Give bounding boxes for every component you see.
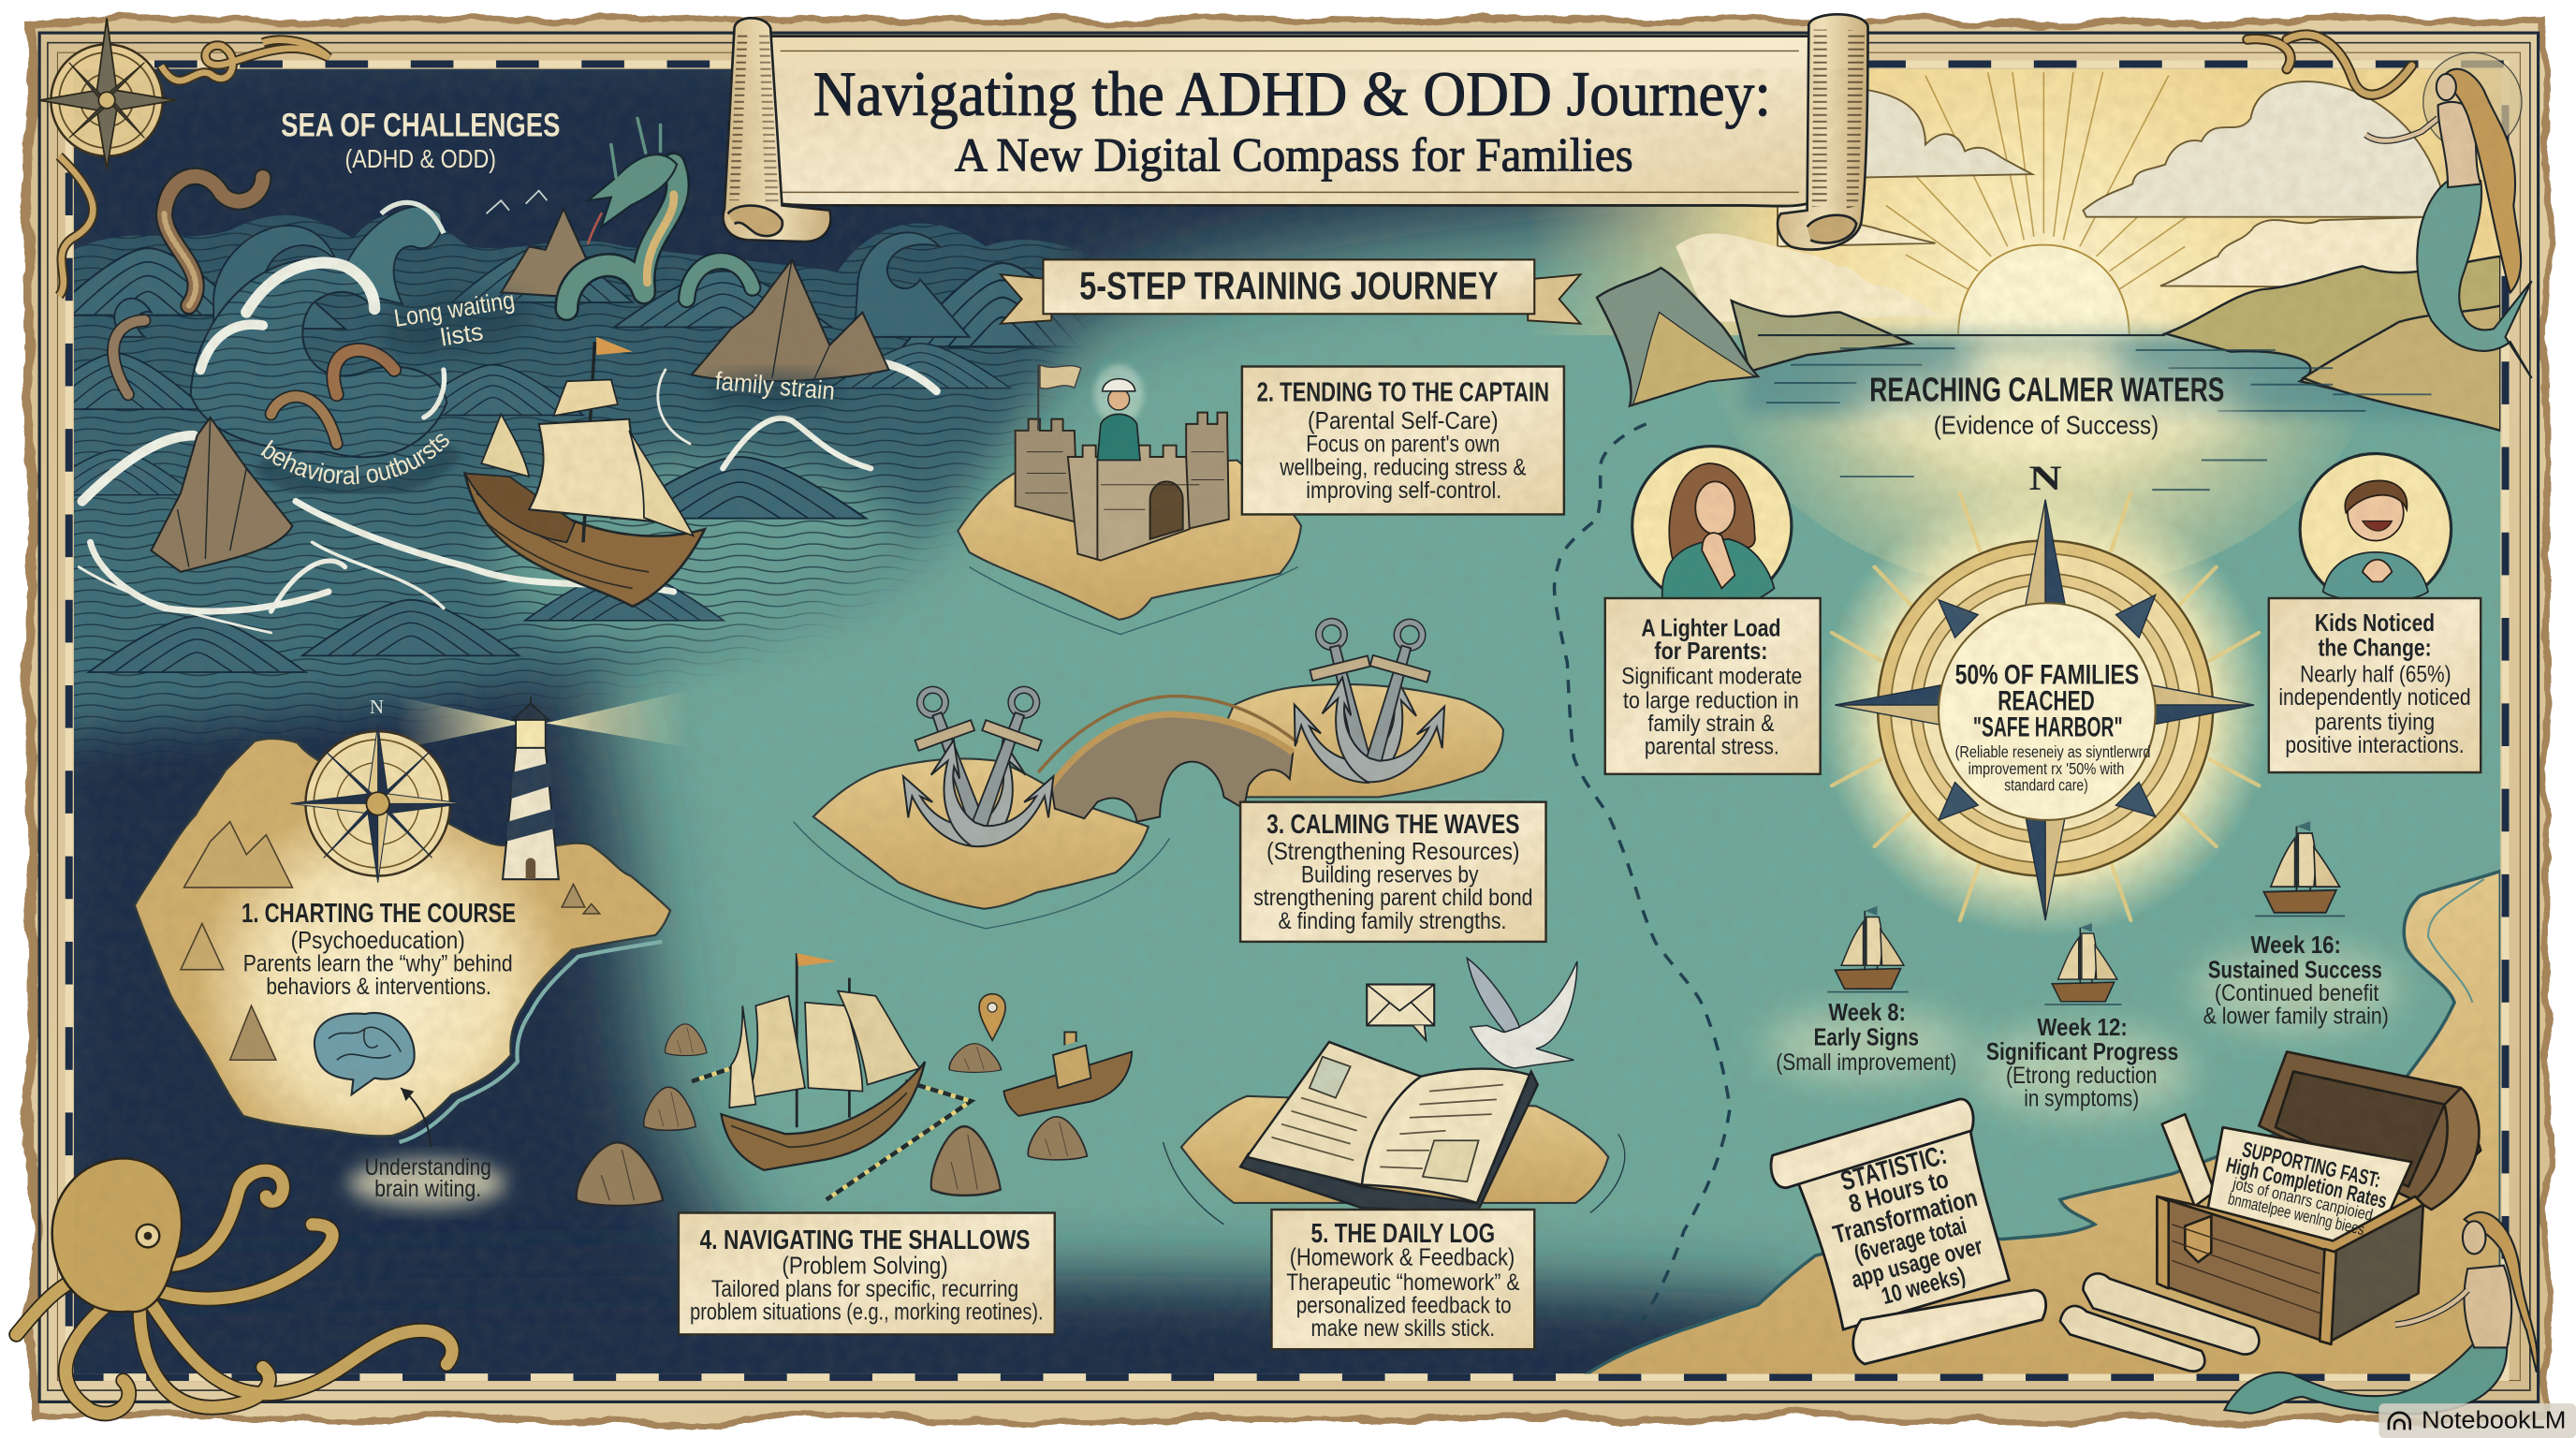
timeline: week 12: in symptoms) bbox=[2024, 1086, 2139, 1111]
timeline: week 8 bbox=[1764, 906, 1969, 1078]
step 2 island and castle bbox=[958, 365, 1301, 635]
sun bbox=[1958, 245, 2130, 335]
step 1 text: Parents learn the “why” behind bbox=[243, 951, 513, 976]
clouds bbox=[1676, 81, 2448, 322]
galleon bbox=[721, 953, 925, 1170]
rolling swells bbox=[49, 248, 247, 315]
rolled paper bbox=[2162, 1114, 2215, 1206]
compass needle points bbox=[1835, 500, 2254, 920]
step 4 card: problem situations (e.g., morking reotines). bbox=[690, 1300, 1043, 1326]
left headland bbox=[1597, 268, 1910, 406]
sandy shore bbox=[1577, 871, 2500, 1381]
arrow and caption: brain wiring: Understanding bbox=[365, 1155, 491, 1181]
timeline: week 12: Week 12: bbox=[2037, 1013, 2128, 1041]
title text: Navigating the ADHD & ODD Journey: bbox=[813, 59, 1771, 129]
card: kids noticed: positive interactions. bbox=[2285, 733, 2465, 758]
step 3 card: Building reserves by bbox=[1301, 863, 1479, 888]
timeline: week 16 bbox=[2195, 821, 2398, 1030]
step 3 card: & finding family strengths. bbox=[1278, 909, 1506, 934]
arrow and caption: brain wiring: brain witing. bbox=[374, 1177, 481, 1202]
sun rays bbox=[1886, 72, 2215, 289]
top left compass ornament bbox=[39, 18, 329, 296]
title scroll banner: A New Digital Compass for Families bbox=[955, 130, 1633, 183]
timeline: week 8: Week 8: bbox=[1828, 998, 1906, 1026]
wave foam bbox=[79, 263, 936, 633]
statistic scroll: Transformation bbox=[1830, 1182, 1981, 1249]
chest lid bbox=[2259, 1051, 2481, 1205]
label: long waiting lists: Long waiting bbox=[392, 286, 517, 332]
treasure chest bbox=[2157, 1051, 2481, 1344]
arrow and caption: brain wiring bbox=[348, 1088, 506, 1206]
step 1 text bbox=[242, 899, 516, 1000]
anchors bbox=[870, 669, 1044, 868]
octopus bbox=[17, 1158, 452, 1414]
big crest wave bbox=[191, 259, 446, 457]
label: behavioral outbursts: behavioral outbursts bbox=[260, 434, 449, 485]
timeline: week 8: (Small improvement) bbox=[1776, 1050, 1956, 1076]
step 3 card: (Strengthening Resources) bbox=[1266, 837, 1519, 865]
step 5 card: make new skills stick. bbox=[1311, 1316, 1495, 1342]
statistic scroll: STATISTIC: bbox=[1837, 1140, 1950, 1197]
timeline: week 12: Significant Progress bbox=[1986, 1037, 2178, 1065]
card: kids noticed: Kids Noticed bbox=[2315, 609, 2435, 637]
section banner: 5-step training journey bbox=[1001, 259, 1580, 324]
card: kids noticed bbox=[2269, 598, 2481, 772]
calmer waters heading: (Evidence of Success) bbox=[1934, 410, 2159, 439]
heading: sea of challenges bbox=[281, 108, 560, 173]
central safe harbor compass: N bbox=[2029, 459, 2062, 497]
left scroll roll bbox=[724, 18, 830, 242]
open book bbox=[1240, 1042, 1538, 1213]
step 3 card: strengthening parent child bond bbox=[1253, 886, 1533, 911]
label: long waiting lists: lists bbox=[438, 317, 485, 352]
top right corner ornament bbox=[2247, 35, 2411, 95]
step 1 text: behaviors & interventions. bbox=[266, 975, 491, 1000]
step 1 island bbox=[135, 739, 670, 1142]
title scroll banner bbox=[724, 14, 1868, 250]
step 1 text: (Psychoeducation) bbox=[291, 926, 465, 954]
card: kids noticed: independently noticed bbox=[2278, 685, 2471, 711]
step 4 card bbox=[679, 1213, 1055, 1334]
captain bbox=[1094, 365, 1144, 461]
central safe harbor compass: (Reliable reseneiy as siyntlerwrd bbox=[1955, 742, 2150, 761]
statistic scroll: 8 Hours to bbox=[1846, 1164, 1952, 1218]
rocks in the sea bbox=[151, 209, 889, 572]
sea serpent bbox=[567, 118, 753, 309]
step 4 shallows scene bbox=[577, 953, 1132, 1206]
step 5 card: 5. THE DAILY LOG bbox=[1311, 1219, 1495, 1249]
card: kids noticed: the Change: bbox=[2318, 633, 2432, 661]
step 2 card: Focus on parent's own bbox=[1306, 433, 1500, 458]
step 5 card: (Homework & Feedback) bbox=[1290, 1243, 1515, 1271]
supporting fact text: bnmatelpee wenlng biees bbox=[2226, 1189, 2366, 1239]
central safe harbor compass bbox=[1819, 459, 2272, 937]
card: lighter load: A Lighter Load bbox=[1641, 613, 1781, 641]
step 1 text: 1. CHARTING THE COURSE bbox=[242, 899, 516, 929]
label: long waiting lists bbox=[377, 283, 536, 365]
timeline: week 16: & lower family strain) bbox=[2203, 1005, 2389, 1030]
step 2 card: wellbeing, reducing stress & bbox=[1279, 455, 1526, 480]
map pin bbox=[979, 994, 1005, 1040]
statistic scroll: (6verage totai bbox=[1852, 1212, 1969, 1268]
seabird bbox=[1467, 958, 1577, 1068]
supporting fact text: jots of onanrs canpioied bbox=[2231, 1174, 2375, 1225]
card: lighter load bbox=[1605, 598, 1821, 774]
step 5 island and log book bbox=[1164, 958, 1625, 1225]
statistic scroll bbox=[1771, 1099, 2046, 1364]
timeline: week 12 bbox=[1975, 923, 2191, 1114]
step 2 card: improving self-control. bbox=[1306, 478, 1501, 504]
heading: sea of challenges: (ADHD & ODD) bbox=[345, 144, 496, 173]
supporting fact paper bbox=[2208, 1127, 2411, 1242]
hazard route bbox=[692, 1065, 971, 1199]
island mountains bbox=[181, 822, 600, 1060]
step 3 card bbox=[1240, 802, 1546, 942]
card: lighter load: Significant moderate bbox=[1621, 664, 1802, 689]
heading: sea of challenges: SEA OF CHALLENGES bbox=[281, 108, 560, 144]
supporting fact text: SUPPORTING FAST: bbox=[2240, 1137, 2383, 1192]
section banner: 5-step training journey: 5-STEP TRAINING JOURNEY bbox=[1079, 263, 1499, 307]
NotebookLM watermark: NotebookLM bbox=[2422, 1405, 2566, 1433]
sea of challenges waves bbox=[74, 116, 1086, 758]
dashed journey route bbox=[1555, 424, 1730, 1320]
flying gulls bbox=[487, 191, 547, 213]
central safe harbor compass: improvement rx '50% with bbox=[1969, 759, 2124, 778]
statistic scroll: app usage over bbox=[1849, 1233, 1985, 1293]
step 2 card: (Parental Self-Care) bbox=[1308, 406, 1499, 434]
card: lighter load: family strain & bbox=[1647, 712, 1775, 737]
right headland bbox=[2165, 257, 2500, 431]
far wave curls bbox=[114, 206, 970, 337]
step 5 card: personalized feedback to bbox=[1296, 1294, 1512, 1319]
bridge bbox=[1038, 696, 1298, 822]
central safe harbor compass: standard care) bbox=[2004, 775, 2088, 794]
step 4 card: (Problem Solving) bbox=[782, 1251, 948, 1279]
step 3 islands, anchors and bridge bbox=[794, 606, 1503, 929]
envelope icon bbox=[1367, 985, 1434, 1040]
compass rays bbox=[1832, 493, 2259, 920]
portrait: relieved parent bbox=[1632, 447, 1792, 610]
step 5 card: Therapeutic “homework” & bbox=[1286, 1270, 1519, 1296]
card: kids noticed: Nearly half (65%) bbox=[2300, 663, 2452, 688]
chest body bbox=[2157, 1196, 2333, 1343]
mermaid on shore bbox=[2224, 1212, 2538, 1414]
card: lighter load: for Parents: bbox=[1654, 637, 1767, 665]
step 1 compass bbox=[291, 696, 465, 883]
storm ship bbox=[465, 337, 705, 607]
kraken tentacle bbox=[113, 176, 394, 444]
small boat bbox=[1003, 1032, 1132, 1116]
label: family strain: family strain bbox=[714, 366, 836, 405]
NotebookLM watermark bbox=[2378, 1403, 2576, 1438]
timeline: week 16: Week 16: bbox=[2250, 931, 2341, 959]
timeline: week 16: (Continued benefit bbox=[2215, 981, 2379, 1006]
calmer waters heading bbox=[1850, 370, 2244, 444]
timeline: week 8: Early Signs bbox=[1814, 1022, 1919, 1050]
card: kids noticed: parents tiying bbox=[2315, 710, 2435, 735]
step 1 compass: N bbox=[370, 696, 384, 718]
statistic scroll: 10 weeks) bbox=[1879, 1262, 1969, 1310]
step 5 card bbox=[1271, 1210, 1534, 1349]
central safe harbor compass: REACHED bbox=[1998, 685, 2095, 716]
calm water band bbox=[1741, 333, 2513, 416]
central safe harbor compass: 50% OF FAMILIES bbox=[1955, 659, 2139, 690]
mermaid on rock bbox=[2365, 52, 2532, 378]
step 2 card: 2. TENDING TO THE CAPTAIN bbox=[1257, 377, 1549, 407]
rolled scrolls bbox=[2060, 1273, 2259, 1372]
supporting fact text: High Completion Rates bbox=[2224, 1152, 2390, 1213]
step 3 card: 3. CALMING THE WAVES bbox=[1266, 810, 1519, 840]
step 4 card: 4. NAVIGATING THE SHALLOWS bbox=[700, 1225, 1030, 1255]
card: lighter load: parental stress. bbox=[1645, 735, 1779, 760]
calmer waters heading: REACHING CALMER WATERS bbox=[1869, 370, 2224, 408]
shallows rocks bbox=[666, 1024, 707, 1056]
castle bbox=[1016, 413, 1229, 561]
central safe harbor compass: "SAFE HARBOR" bbox=[1973, 712, 2123, 742]
portrait: happy child bbox=[2300, 453, 2452, 605]
card: lighter load: to large reduction in bbox=[1623, 689, 1799, 714]
supporting fact text bbox=[2224, 1137, 2390, 1239]
step 4 card: Tailored plans for specific, recurring bbox=[711, 1277, 1018, 1302]
timeline: week 16: Sustained Success bbox=[2208, 955, 2382, 983]
icon: brain bbox=[315, 1013, 415, 1094]
right scroll roll bbox=[1778, 14, 1868, 250]
step 1 lighthouse bbox=[398, 690, 690, 879]
sunny sky bbox=[1539, 69, 2501, 577]
step 2 card bbox=[1242, 366, 1564, 514]
timeline: week 12: (Etrong reduction bbox=[2006, 1064, 2157, 1089]
